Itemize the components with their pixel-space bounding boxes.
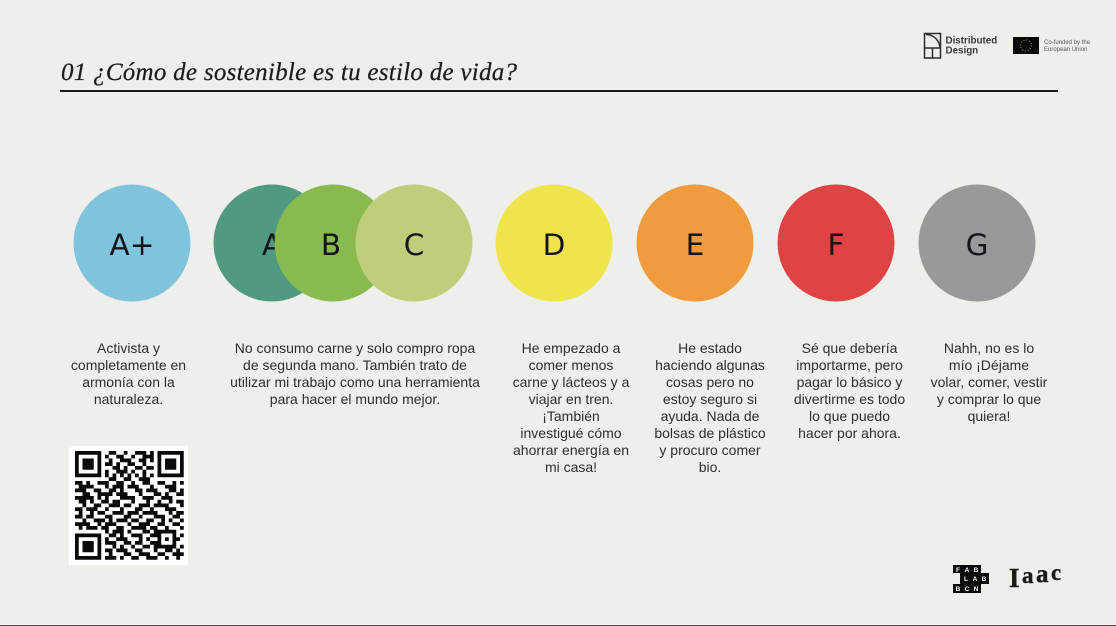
circle D: D [543,228,565,262]
logo: European Union co-funding: Co-funded by the [1044,40,1091,46]
text block: D: He empezado a [522,340,620,356]
circle E: E [686,228,704,262]
logo: European Union co-funding: European Union [1044,47,1087,53]
text block: G: volar, comer, vestir [931,374,1047,390]
logo: Fab Lab BCN: F [956,567,960,574]
text block: A, B, C: No consumo carne y solo compro ropa [235,340,475,356]
text block: A, B, C: para hacer el mundo mejor. [270,391,440,407]
logo: European Union co-funding [1013,37,1091,54]
logo: Fab Lab BCN: C [965,586,970,593]
text block: G [930,340,1048,424]
text block: D: ahorrar energía en [513,442,629,458]
text block: A+: Activista y [97,340,160,356]
logo: Fab Lab BCN: A [973,576,978,583]
logo: Fab Lab BCN: N [974,586,979,593]
text block: E: estoy seguro si [663,391,757,407]
text block: A, B, C: de segunda mano. También trato de [243,357,467,373]
circle A: A [262,228,282,262]
logo: Fab Lab BCN: B [956,586,961,593]
text block: F: divertirme es todo [794,391,905,407]
circle C [356,184,472,302]
text block: G: quiera! [968,408,1010,424]
logo: Distributed Design [924,34,997,58]
text block: G: mío ¡Déjame [949,357,1029,373]
circle A+: A+ [110,228,154,262]
logo: Fab Lab BCN [953,565,989,593]
logo: Fab Lab BCN: A [965,567,970,574]
circle F: F [828,228,844,262]
text block: F: hacer por ahora. [798,425,901,441]
logo: Iaac: a [1022,563,1034,588]
text block: A+: completamente en [71,357,186,373]
circle A+ [74,184,190,302]
circle C: C [404,228,424,262]
text block: E: bio. [699,459,721,475]
text block: G: Nahh, no es lo [944,340,1034,356]
text block: F [794,340,905,441]
text block: A+: naturaleza. [94,391,163,407]
text block: D [513,340,630,475]
text block: F: importarme, pero [796,357,903,373]
text block: D: viajar en tren. [529,391,613,407]
logo: Distributed Design: Design [946,46,978,56]
QR code [69,446,188,565]
logo: Iaac [1009,560,1061,593]
text block: E: bolsas de plástico [654,425,766,441]
text block: F: lo que puedo [809,408,890,424]
title: 01 ¿Cómo de sostenible es tu estilo de vida? [61,59,517,86]
circle A [214,184,330,302]
circle D [496,184,612,302]
circle E [636,184,754,302]
text block: A, B, C: utilizar mi trabajo como una herramienta [230,374,480,390]
text block: A+ [71,340,186,407]
text block: A+: armonía con la [82,374,175,390]
circle G [918,184,1036,302]
text block: E [654,340,766,475]
logo: Fab Lab BCN: B [974,567,979,574]
text block: D: investigué cómo [520,425,622,441]
circle B: B [321,228,341,262]
circles rating scale [74,184,1036,302]
logo: Iaac: I [1009,563,1020,593]
text block: E: He estado [678,340,742,356]
text block: A, B, C [230,340,480,407]
text block: D: carne y lácteos y a [513,374,629,390]
text block: D: mi casa! [545,459,597,475]
text block: D: ¡También [542,408,600,424]
text block: F: pagar lo básico y [797,374,902,390]
logo: Fab Lab BCN: B [982,576,987,583]
circle G: G [966,228,988,262]
text block: D: comer menos [529,357,613,373]
text block: E: ayuda. Nada de [661,408,759,424]
circle B [274,184,392,302]
logo: Distributed Design: Distributed [946,36,997,46]
text block: G: y comprar lo que [937,391,1041,407]
logo: Iaac: a [1036,561,1049,588]
logo: Iaac: c [1051,560,1061,585]
text block: E: y procuro comer [659,442,761,458]
text block: E: haciendo algunas [655,357,765,373]
text block: F: Sé que debería [802,340,897,356]
circle F [778,184,894,302]
logo: Fab Lab BCN: L [964,576,968,583]
text block: E: cosas pero no [666,374,754,390]
